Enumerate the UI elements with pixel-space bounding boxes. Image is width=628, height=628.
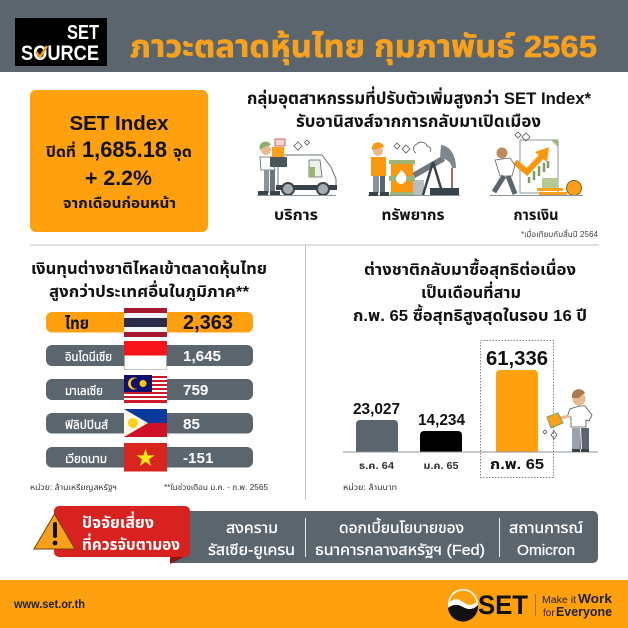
- icon: finance growth arrow: [490, 132, 583, 196]
- icon: resources oil pump: [368, 142, 460, 196]
- header band: [0, 0, 628, 72]
- panel: SET Index: จุด: [173, 144, 192, 161]
- bar: Dec 64: [353, 401, 400, 472]
- red label: ปัจจัยเสี่ยง: [82, 511, 154, 532]
- row: Vietnam: เวียดนาม: [65, 452, 107, 466]
- heading: net foreign buying: ต่างชาติกลับมาซื้อสุทธิต่อเนื่อง: [364, 258, 576, 279]
- red label: [54, 506, 190, 564]
- SET logo: [448, 589, 528, 622]
- tagline: Make it: [542, 595, 576, 606]
- footer band: [0, 580, 628, 628]
- bar: Dec 64: 23,027: [353, 401, 400, 418]
- row: Malaysia: 759: [183, 382, 208, 399]
- icon: service delivery van: [257, 139, 337, 196]
- unit note: million USD: หน่วย: ล้านเหรียญสหรัฐฯ: [30, 482, 117, 492]
- bar: Jan 65: ม.ค. 65: [424, 461, 459, 472]
- logo: SET SOURCE: [15, 18, 107, 66]
- logo: SET SOURCE: SET: [67, 22, 99, 44]
- row: Indonesia: [46, 341, 253, 370]
- row: Malaysia: [46, 375, 253, 403]
- unit note: million baht: หน่วย: ล้านบาท: [343, 482, 397, 492]
- flag: Vietnam: [124, 443, 167, 472]
- icon: warning triangle: [34, 514, 75, 549]
- risk: Russia-Ukraine war: สงคราม: [226, 520, 278, 537]
- bar: Feb 65: 61,336: [486, 348, 548, 370]
- row: Philippines: 85: [183, 416, 200, 433]
- row: Vietnam: -151: [183, 450, 214, 467]
- footnote: compared to end of 2564: *เมื่อเทียบกับสิ้นปี 2564: [521, 228, 599, 239]
- heading: foreign fund flows: สูงกว่าประเทศอื่นในภูมิภาค**: [49, 280, 250, 302]
- website: www.set.or.th: [13, 599, 85, 611]
- risk: Russia-Ukraine war: [208, 520, 295, 559]
- label: finance: การเงิน: [514, 207, 558, 224]
- risk: Omicron: สถานการณ์: [509, 520, 583, 537]
- tagline: Everyone: [556, 604, 612, 619]
- row: Thailand: [46, 308, 253, 337]
- flag: Philippines: [124, 409, 167, 437]
- row: Vietnam: [46, 443, 253, 472]
- risk: Fed policy rate: ดอกเบี้ยนโยบายของ: [339, 517, 464, 537]
- logo: SET SOURCE: SOURCE: [21, 42, 99, 65]
- bar chart: net foreign buying: [343, 340, 598, 478]
- flag: Thailand: [124, 308, 167, 337]
- row: Indonesia: อินโดนีเซีย: [65, 350, 112, 364]
- icon: man with banknotes: [543, 389, 592, 452]
- bar: Dec 64: ธ.ค. 64: [359, 461, 394, 472]
- risk: Russia-Ukraine war: รัสเซีย-ยูเครน: [208, 542, 295, 559]
- heading: net foreign buying: ก.พ. 65 ซื้อสุทธิสูงสุดในรอบ 16 ปี: [353, 304, 587, 326]
- risk: Fed policy rate: ธนาคารกลางสหรัฐฯ (Fed): [315, 542, 485, 559]
- risk: Omicron: Omicron: [517, 542, 575, 559]
- heading: industries: รับอานิสงส์จากการกลับมาเปิดเมือง: [296, 112, 541, 131]
- tagline: for: [543, 608, 555, 619]
- SET logo: SET: [478, 590, 528, 620]
- banner: risk factors: [34, 506, 598, 564]
- panel: SET Index: 1,685.18: [82, 137, 167, 162]
- bar: Jan 65: 14,234: [418, 412, 465, 429]
- bar: Jan 65: [418, 412, 465, 472]
- bar: Feb 65: [486, 348, 548, 473]
- row: Philippines: ฟิลิปปินส์: [65, 418, 108, 432]
- red label: ที่ควรจับตามอง: [82, 533, 180, 554]
- row: Thailand: 2,363: [183, 312, 233, 334]
- flag: Malaysia: [124, 375, 167, 403]
- bar: Feb 65: ก.พ. 65: [490, 457, 544, 473]
- flag: Indonesia: [124, 341, 167, 370]
- heading: foreign fund flows: เงินทุนต่างชาติไหลเข้าตลาดหุ้นไทย: [31, 260, 267, 278]
- panel: SET Index: + 2.2%: [85, 166, 152, 190]
- heading: industries: กลุ่มอุตสาหกรรมที่ปรับตัวเพิ่มสูงกว่า SET Index*: [247, 86, 591, 109]
- row: Philippines: [46, 409, 253, 437]
- row: Indonesia: 1,645: [183, 348, 222, 365]
- heading: net foreign buying: เป็นเดือนที่สาม: [421, 281, 521, 302]
- heading: net foreign buying: [353, 258, 587, 326]
- heading: foreign fund flows: [31, 260, 267, 302]
- panel: SET Index: SET Index: [69, 112, 169, 135]
- label: resources: ทรัพยากร: [382, 207, 445, 224]
- row: Malaysia: มาเลเซีย: [65, 384, 103, 398]
- risk: Fed policy rate: [315, 517, 485, 559]
- risk: Omicron: [509, 520, 583, 559]
- title: ภาวะตลาดหุ้นไทย กุมภาพันธ์ 2565: [130, 29, 597, 65]
- row: Thailand: ไทย: [65, 314, 89, 333]
- panel: SET Index: ปิดที่: [46, 141, 76, 161]
- panel: SET Index: [30, 90, 208, 232]
- heading: industries: [247, 86, 591, 131]
- panel: SET Index: จากเดือนก่อนหน้า: [63, 195, 176, 211]
- tagline: [542, 591, 613, 619]
- label: service: บริการ: [274, 207, 318, 224]
- tagline: Work: [578, 591, 613, 606]
- footnote: Jan-Feb 2565: **ในช่วงเดือน ม.ค. - ก.พ. 2565: [164, 482, 269, 492]
